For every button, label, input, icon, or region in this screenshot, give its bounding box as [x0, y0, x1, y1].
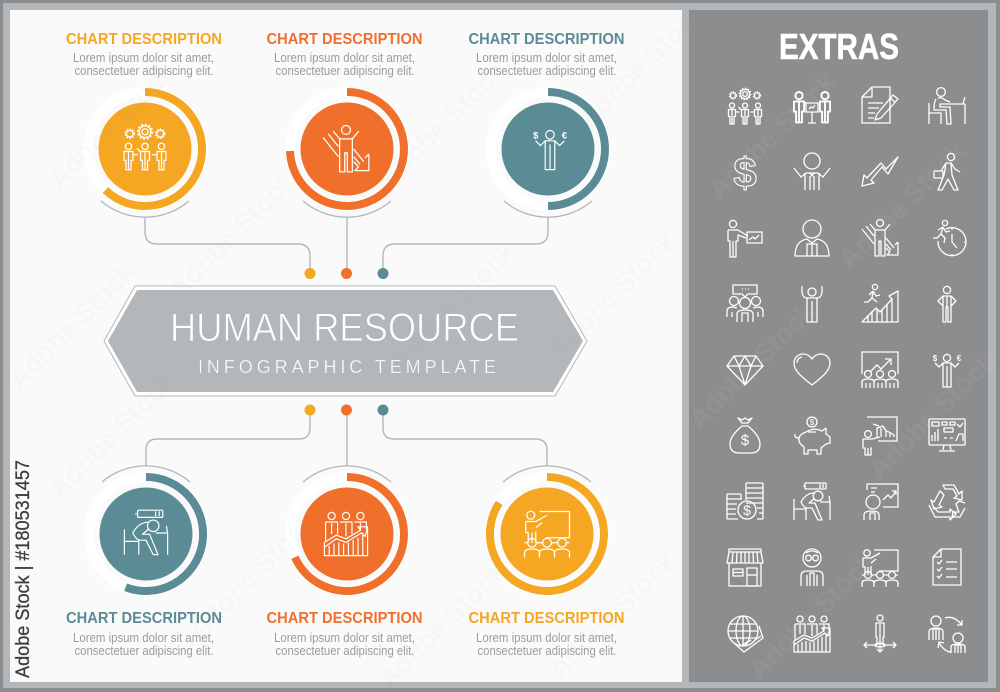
icon: falling businessman: [862, 220, 898, 256]
panel: infographic: [10, 10, 682, 682]
icon: group discussion: [727, 285, 763, 322]
chart item 4: [66, 466, 222, 658]
heading 2: CHART DESCRIPTION: [266, 31, 422, 48]
icon: audience board: [862, 352, 898, 388]
icon: money bag: [730, 418, 760, 453]
watermark: Adobe Stock: [743, 546, 882, 684]
chart item 5: [266, 466, 422, 658]
heading 5: CHART DESCRIPTION: [266, 610, 422, 627]
watermark: Adobe Stock: [863, 346, 1000, 484]
icon: bust: [795, 220, 829, 256]
stock id label: Adobe Stock | #180531457: [13, 460, 34, 678]
watermark: Adobe Stock: [43, 56, 182, 194]
description 5: Lorem ipsum dolor sit amet,: [274, 631, 415, 645]
description 6: Lorem ipsum dolor sit amet,: [476, 631, 617, 645]
icon: diamond: [727, 356, 763, 385]
description 5: consectetuer adipiscing elit.: [276, 644, 414, 658]
title banner: [104, 286, 587, 396]
icon: meeting: [794, 92, 830, 123]
chart item 1: [66, 31, 222, 217]
chart item 3: [468, 31, 624, 217]
watermark: Adobe Stock: [183, 506, 322, 644]
connector dots: [304, 268, 388, 416]
donut 1: [88, 92, 202, 217]
icon: team with gears: [124, 125, 166, 170]
heading 3: CHART DESCRIPTION: [468, 31, 624, 48]
icon: staff exchange: [929, 616, 965, 653]
icon: coins: [727, 483, 763, 519]
description 1: consectetuer adipiscing elit.: [74, 64, 214, 78]
watermark: Adobe Stock: [373, 556, 512, 692]
icon: teacher with audience: [524, 511, 570, 558]
chart item 2: [266, 31, 422, 217]
icon: down arrow: [862, 157, 898, 186]
icon: shrugging person: [794, 153, 830, 190]
description 1: Lorem ipsum dolor sit amet,: [73, 51, 214, 65]
icon: presenter: [728, 220, 762, 257]
watermark: Adobe Stock: [3, 256, 142, 394]
icon: tired worker: [794, 483, 830, 520]
donut 5: [290, 466, 404, 591]
icon: checklist: [933, 549, 961, 585]
extras background: [689, 10, 988, 682]
heading 1: CHART DESCRIPTION: [66, 31, 222, 48]
donut 2: [290, 92, 404, 217]
heading 4: CHART DESCRIPTION: [66, 610, 222, 627]
icon: directions: [864, 615, 896, 652]
icon: teacher: [862, 550, 898, 587]
description 4: consectetuer adipiscing elit.: [74, 644, 214, 658]
extras heading: EXTRAS: [779, 26, 899, 67]
icon: heart: [794, 354, 830, 385]
icon: person with glasses: [801, 549, 823, 586]
icon: businessman with currencies: [533, 130, 568, 170]
icon: growth runner: [862, 284, 898, 322]
connector lines: [145, 217, 548, 466]
icon: globe in hand: [728, 616, 763, 652]
title: HUMAN RESOURCE: [170, 306, 519, 350]
icon: document and pen: [862, 87, 898, 123]
watermark: Adobe Stock: [683, 296, 822, 434]
subtitle: INFOGRAPHIC TEMPLATE: [198, 357, 496, 377]
watermark: Adobe Stock: [833, 136, 972, 274]
icon: dollar: [733, 149, 757, 196]
donut 3: [491, 92, 605, 217]
icon: bust with chart: [864, 484, 898, 520]
icon: money juggling: [933, 354, 962, 387]
watermark: Adobe Stock: [373, 56, 512, 194]
icon: piggy bank: [795, 417, 830, 454]
icon: tired worker: [124, 510, 168, 555]
icon: dashboard monitor: [929, 419, 965, 451]
watermark: Adobe Stock: [573, 0, 712, 134]
heading 6: CHART DESCRIPTION: [468, 610, 624, 627]
description 3: Lorem ipsum dolor sit amet,: [476, 51, 617, 65]
donut 4: [89, 466, 203, 591]
icon: recycle: [929, 485, 965, 520]
watermark: Adobe Stock: [543, 546, 682, 684]
description 4: Lorem ipsum dolor sit amet,: [73, 631, 214, 645]
icon: arms raised: [802, 286, 822, 322]
icon: decline chart presenter: [863, 417, 897, 455]
icon: team gears: [728, 88, 762, 124]
watermark: Adobe Stock: [703, 66, 842, 204]
description 2: Lorem ipsum dolor sit amet,: [274, 51, 415, 65]
watermark: Adobe Stock: [383, 236, 522, 374]
donut 6: [490, 466, 604, 591]
icon: running against clock: [933, 220, 966, 256]
icon: falling businessman: [323, 126, 369, 172]
panel background: [10, 10, 682, 682]
icon: team growth chart: [324, 512, 368, 556]
panel: extras: [689, 10, 988, 682]
watermark: Adobe Stock: [163, 166, 302, 304]
icon: hands on hips: [938, 286, 956, 322]
icon: desk worker: [929, 88, 965, 124]
extras icon grid: [727, 87, 966, 653]
description 3: consectetuer adipiscing elit.: [478, 64, 616, 78]
icon: shop: [727, 549, 763, 586]
icon: team chart: [794, 616, 830, 652]
icon: walking businessman: [934, 153, 960, 190]
watermark: Adobe Stock: [543, 226, 682, 364]
description 2: consectetuer adipiscing elit.: [276, 64, 414, 78]
chart item 6: [468, 466, 624, 658]
description 6: consectetuer adipiscing elit.: [478, 644, 616, 658]
watermark: Adobe Stock: [43, 366, 182, 504]
